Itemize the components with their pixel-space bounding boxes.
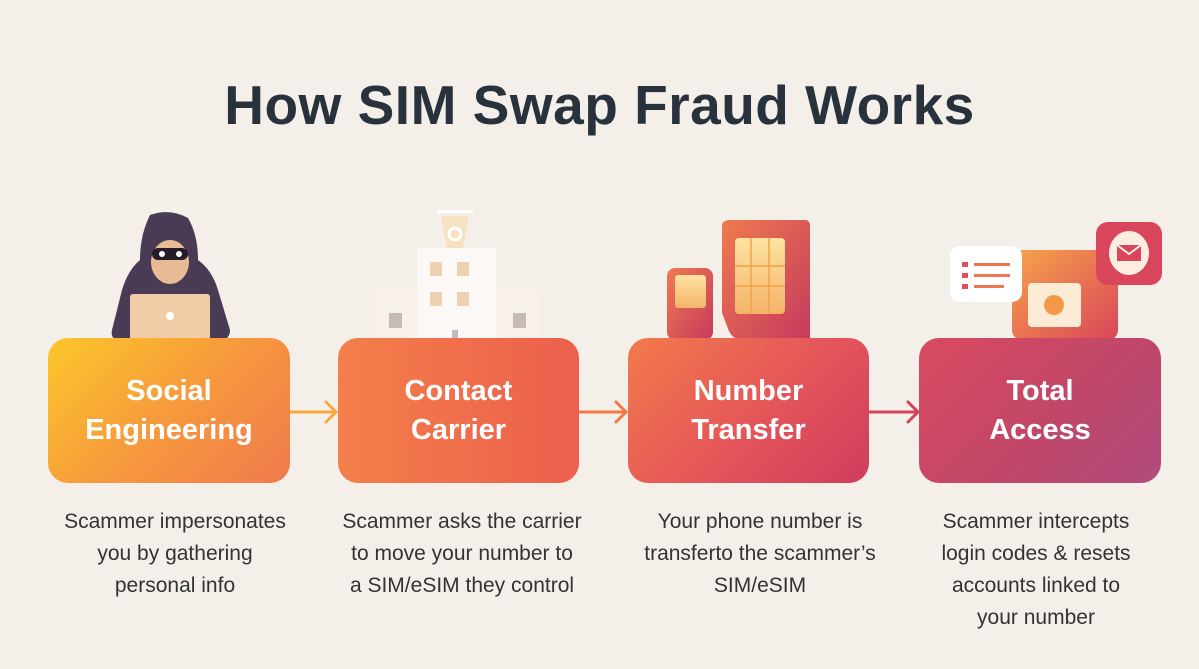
text: step 1: personal info	[115, 574, 235, 597]
arrow 1	[290, 400, 338, 424]
text: step 4: accounts linked to	[952, 574, 1120, 597]
box: Social Engineering	[48, 338, 290, 483]
box: Number Transfer	[628, 338, 869, 483]
text: step 4: your number	[977, 606, 1095, 629]
box: Social Engineering: Social	[126, 374, 212, 406]
icon: SIM cards	[667, 220, 810, 338]
box: Contact Carrier	[338, 338, 579, 483]
text: step 2	[342, 510, 582, 597]
icon: hacker	[112, 212, 230, 338]
text: step 1	[64, 510, 286, 597]
text: step 1: Scammer impersonates	[64, 510, 286, 533]
text: step 3: Your phone number is	[658, 510, 862, 533]
box: Contact Carrier: Carrier	[411, 414, 506, 446]
text: step 4	[941, 510, 1131, 629]
box: Social Engineering: Engineering	[85, 414, 253, 446]
text: step 4: login codes & resets	[941, 542, 1131, 565]
icon: carrier building	[389, 210, 526, 338]
text: step 2: a SIM/eSIM they control	[350, 574, 574, 597]
title: How SIM Swap Fraud Works	[224, 74, 975, 136]
text: step 1: you by gathering	[97, 542, 253, 565]
arrow 3	[869, 400, 919, 424]
text: step 2: Scammer asks the carrier	[342, 510, 582, 533]
box: Total Access	[919, 338, 1161, 483]
box: Number Transfer: Transfer	[691, 414, 806, 446]
box: Total Access: Total	[1006, 374, 1074, 406]
text: step 3: transferto the scammer’s	[644, 542, 876, 565]
arrow 2	[579, 400, 628, 424]
text: step 3: SIM/eSIM	[714, 574, 806, 597]
icon: access apps	[950, 222, 1162, 338]
box: Number Transfer: Number	[694, 374, 803, 406]
box: Contact Carrier: Contact	[405, 374, 512, 406]
text: step 4: Scammer intercepts	[943, 510, 1129, 533]
text: step 3	[644, 510, 876, 597]
box: Total Access: Access	[989, 414, 1091, 446]
text: step 2: to move your number to	[351, 542, 573, 565]
